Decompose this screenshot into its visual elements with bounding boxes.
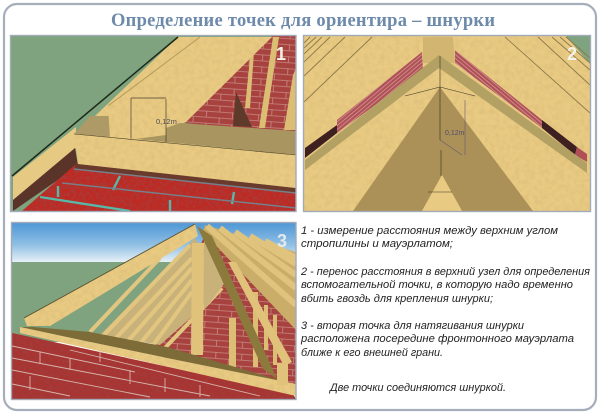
step 3: 3 - вторая точка для натягивания шнурки (301, 320, 525, 332)
right olive rafter (439, 55, 587, 173)
measuring lines (131, 98, 166, 143)
central dark wood chevron (353, 87, 533, 211)
dimension label: 0,12m (445, 130, 465, 137)
dimension label: 0,12m (156, 117, 177, 126)
step 1: стропилины и мауэрлатом; (301, 238, 453, 250)
fan background (101, 238, 204, 345)
fan behind hip (204, 240, 224, 310)
step 3 (300, 320, 574, 359)
panel 3: roof frame overview (12, 223, 296, 399)
front wall plate board (20, 327, 296, 396)
left dark strip (305, 125, 337, 158)
rafter seam (108, 37, 200, 106)
panel number 1: 1 (276, 44, 286, 64)
panel number 2: 2 (567, 44, 577, 64)
inner rafters (245, 37, 296, 130)
central king post (191, 243, 204, 355)
vertical studs (229, 292, 277, 368)
title: Определение точек для ориентира – шнурки (111, 11, 495, 31)
dark eave underside (13, 148, 78, 211)
post at right corner (277, 363, 288, 385)
right hip light rafter (228, 262, 292, 366)
step 3: ближе к его внешней грани. (301, 347, 443, 359)
right dark strip (542, 120, 577, 155)
inner rafter fan (90, 245, 222, 350)
ground (12, 262, 171, 342)
brick back wall (150, 235, 296, 385)
right brick strip (455, 50, 542, 128)
mortar joints (40, 176, 234, 211)
eave edge line (12, 37, 178, 176)
step 1 (301, 225, 558, 250)
brick gable wall behind rafters (185, 36, 296, 135)
step 3: расположена посередине фронтонного мауэрлата (300, 333, 574, 345)
dark gap (233, 92, 252, 127)
front beam (74, 134, 296, 188)
beam top faces (135, 123, 296, 155)
purlin lines (304, 37, 590, 113)
central post (423, 37, 455, 63)
closing note: Две точки соединяются шнуркой. (328, 382, 506, 394)
panel number 3: 3 (277, 231, 287, 251)
panel 2: ridge node view (304, 36, 590, 211)
step 2 (300, 266, 590, 305)
stacked far roof rafters (203, 225, 296, 330)
sky (12, 223, 296, 262)
beam shadow strip (74, 163, 296, 193)
left hip rafter (24, 224, 198, 326)
eave board (13, 127, 76, 200)
left olive rafter (305, 55, 439, 170)
right hip rafter dark face (197, 226, 277, 379)
panel 1: measuring at the rafter (11, 36, 296, 211)
measuring lines (405, 56, 475, 192)
explanation text (300, 225, 590, 394)
step 1: 1 - измерение расстояния между верхним углом (301, 225, 558, 237)
step 2: вбить гвоздь для крепления шнурки; (301, 293, 493, 305)
sky corner (566, 36, 590, 64)
measuring block (108, 106, 166, 139)
brick wall below (22, 164, 296, 211)
sloped rafter boards (95, 37, 272, 139)
lower triangle (422, 175, 462, 211)
wall plate dark top (20, 327, 293, 384)
step 2: вспомогательной точки, в которую надо временно (301, 279, 573, 291)
step 2: 2 - перенос расстояния в верхний узел для определения (300, 266, 590, 278)
left brick strip (337, 52, 423, 133)
brick front wall (12, 333, 296, 399)
